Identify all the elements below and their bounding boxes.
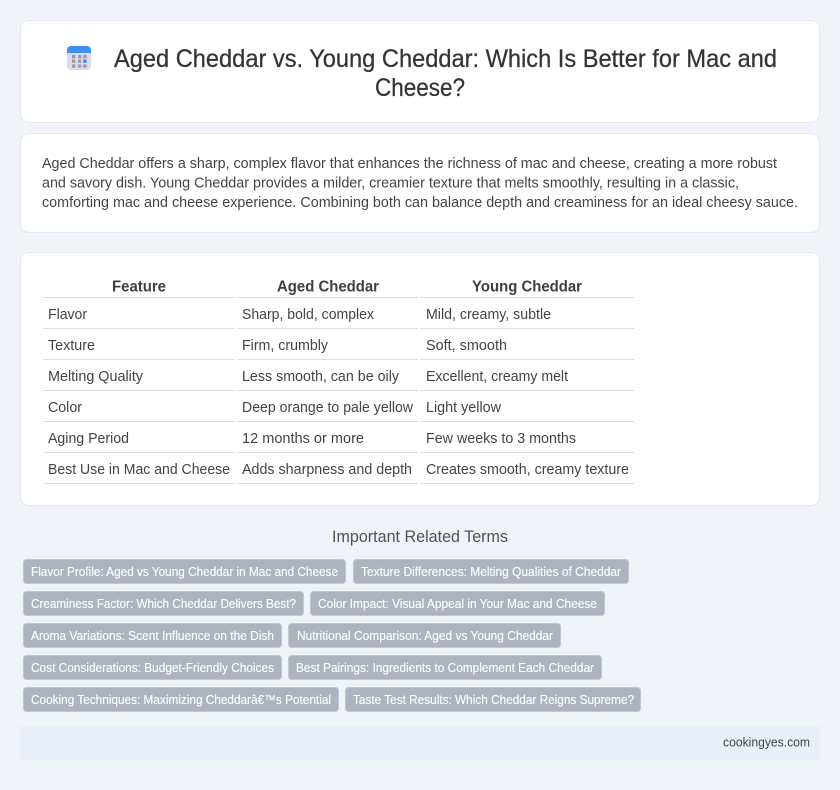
tag: cooking techniques [24,688,338,712]
table row: texture: Texture [48,338,95,354]
heading: related terms: Important Related Terms [332,528,508,546]
table row: aging period: Few weeks to 3 months [426,431,576,447]
tag: cooking techniques: Cooking Techniques: Maximizing Cheddarâ€™s Potential [31,693,331,707]
table grid lines [43,298,634,484]
tag: cost considerations: Cost Considerations: Budget-Friendly Choices [31,661,274,675]
table row: best use: Adds sharpness and depth [242,462,412,478]
table row: melting quality [48,369,568,385]
tag: color impact: Color Impact: Visual Appeal in Your Mac and Cheese [318,597,597,611]
tag: creaminess factor: Creaminess Factor: Which Cheddar Delivers Best? [31,597,296,611]
table row: best use: Best Use in Mac and Cheese [48,462,230,478]
tag: aroma variations: Aroma Variations: Scent Influence on the Dish [31,629,274,643]
table row: texture: Firm, crumbly [242,338,329,354]
table row: texture [48,338,507,354]
table row: melting quality: Less smooth, can be oily [242,369,400,385]
table row: flavor: Flavor [48,307,87,323]
text block: summary: comforting mac and cheese experience. Combining both can balance depth and creaminess for an ideal cheesy sauce. [42,195,798,211]
title [114,45,777,102]
table row: best use [48,462,629,478]
text block: summary: Aged Cheddar offers a sharp, complex flavor that enhances the richness of mac and cheese, creating a more robust [42,156,777,172]
tag: taste test: Taste Test Results: Which Cheddar Reigns Supreme? [353,693,634,707]
panel: title header [20,20,820,122]
footer [20,726,820,760]
tag: best pairings [288,656,602,680]
table header row: Aged Cheddar [277,278,379,296]
tag list: related terms [24,560,640,712]
table header row: Feature [112,278,166,296]
tag: color impact [310,592,604,616]
title: Cheese? [375,74,465,102]
table row: melting quality: Excellent, creamy melt [426,369,568,385]
table row: melting quality: Melting Quality [48,369,144,385]
table row: flavor [48,307,551,323]
table row: flavor: Mild, creamy, subtle [426,307,551,323]
text block: summary: and savory dish. Young Cheddar provides a milder, creamier texture that melts smoothly, resulting in a classic, [42,176,739,192]
table row: aging period: 12 months or more [242,431,364,447]
tag: best pairings: Best Pairings: Ingredients to Complement Each Cheddar [296,661,594,675]
tag: creaminess factor [24,592,304,616]
table header row: Young Cheddar [472,278,582,296]
tag: cost considerations [24,656,282,680]
table row: texture: Soft, smooth [426,338,507,354]
icon: calendar [67,46,91,70]
tag: flavor profile [24,560,346,584]
table row: flavor: Sharp, bold, complex [242,307,375,323]
tag: taste test [346,688,640,712]
panel: comparison table [20,252,820,506]
table row: aging period: Aging Period [48,431,129,447]
table row: aging period [48,431,576,447]
table row: best use: Creates smooth, creamy texture [426,462,629,478]
table row: color: Light yellow [426,400,502,416]
text block: summary [42,156,798,211]
tag: flavor profile: Flavor Profile: Aged vs Young Cheddar in Mac and Cheese [31,565,338,579]
table row: color: Color [48,400,82,416]
panel: summary paragraph [20,134,820,232]
table row: color [48,400,502,416]
tag: nutritional comparison: Nutritional Comparison: Aged vs Young Cheddar [297,629,553,643]
tag: texture differences [354,560,628,584]
footer: cookingyes.com [723,736,810,750]
table header row [112,278,582,296]
title: Aged Cheddar vs. Young Cheddar: Which Is Better for Mac and [114,45,777,73]
tag: nutritional comparison [288,624,560,648]
table row: color: Deep orange to pale yellow [242,400,414,416]
tag: texture differences: Texture Differences: Melting Qualities of Cheddar [361,565,621,579]
tag: aroma variations [24,624,282,648]
